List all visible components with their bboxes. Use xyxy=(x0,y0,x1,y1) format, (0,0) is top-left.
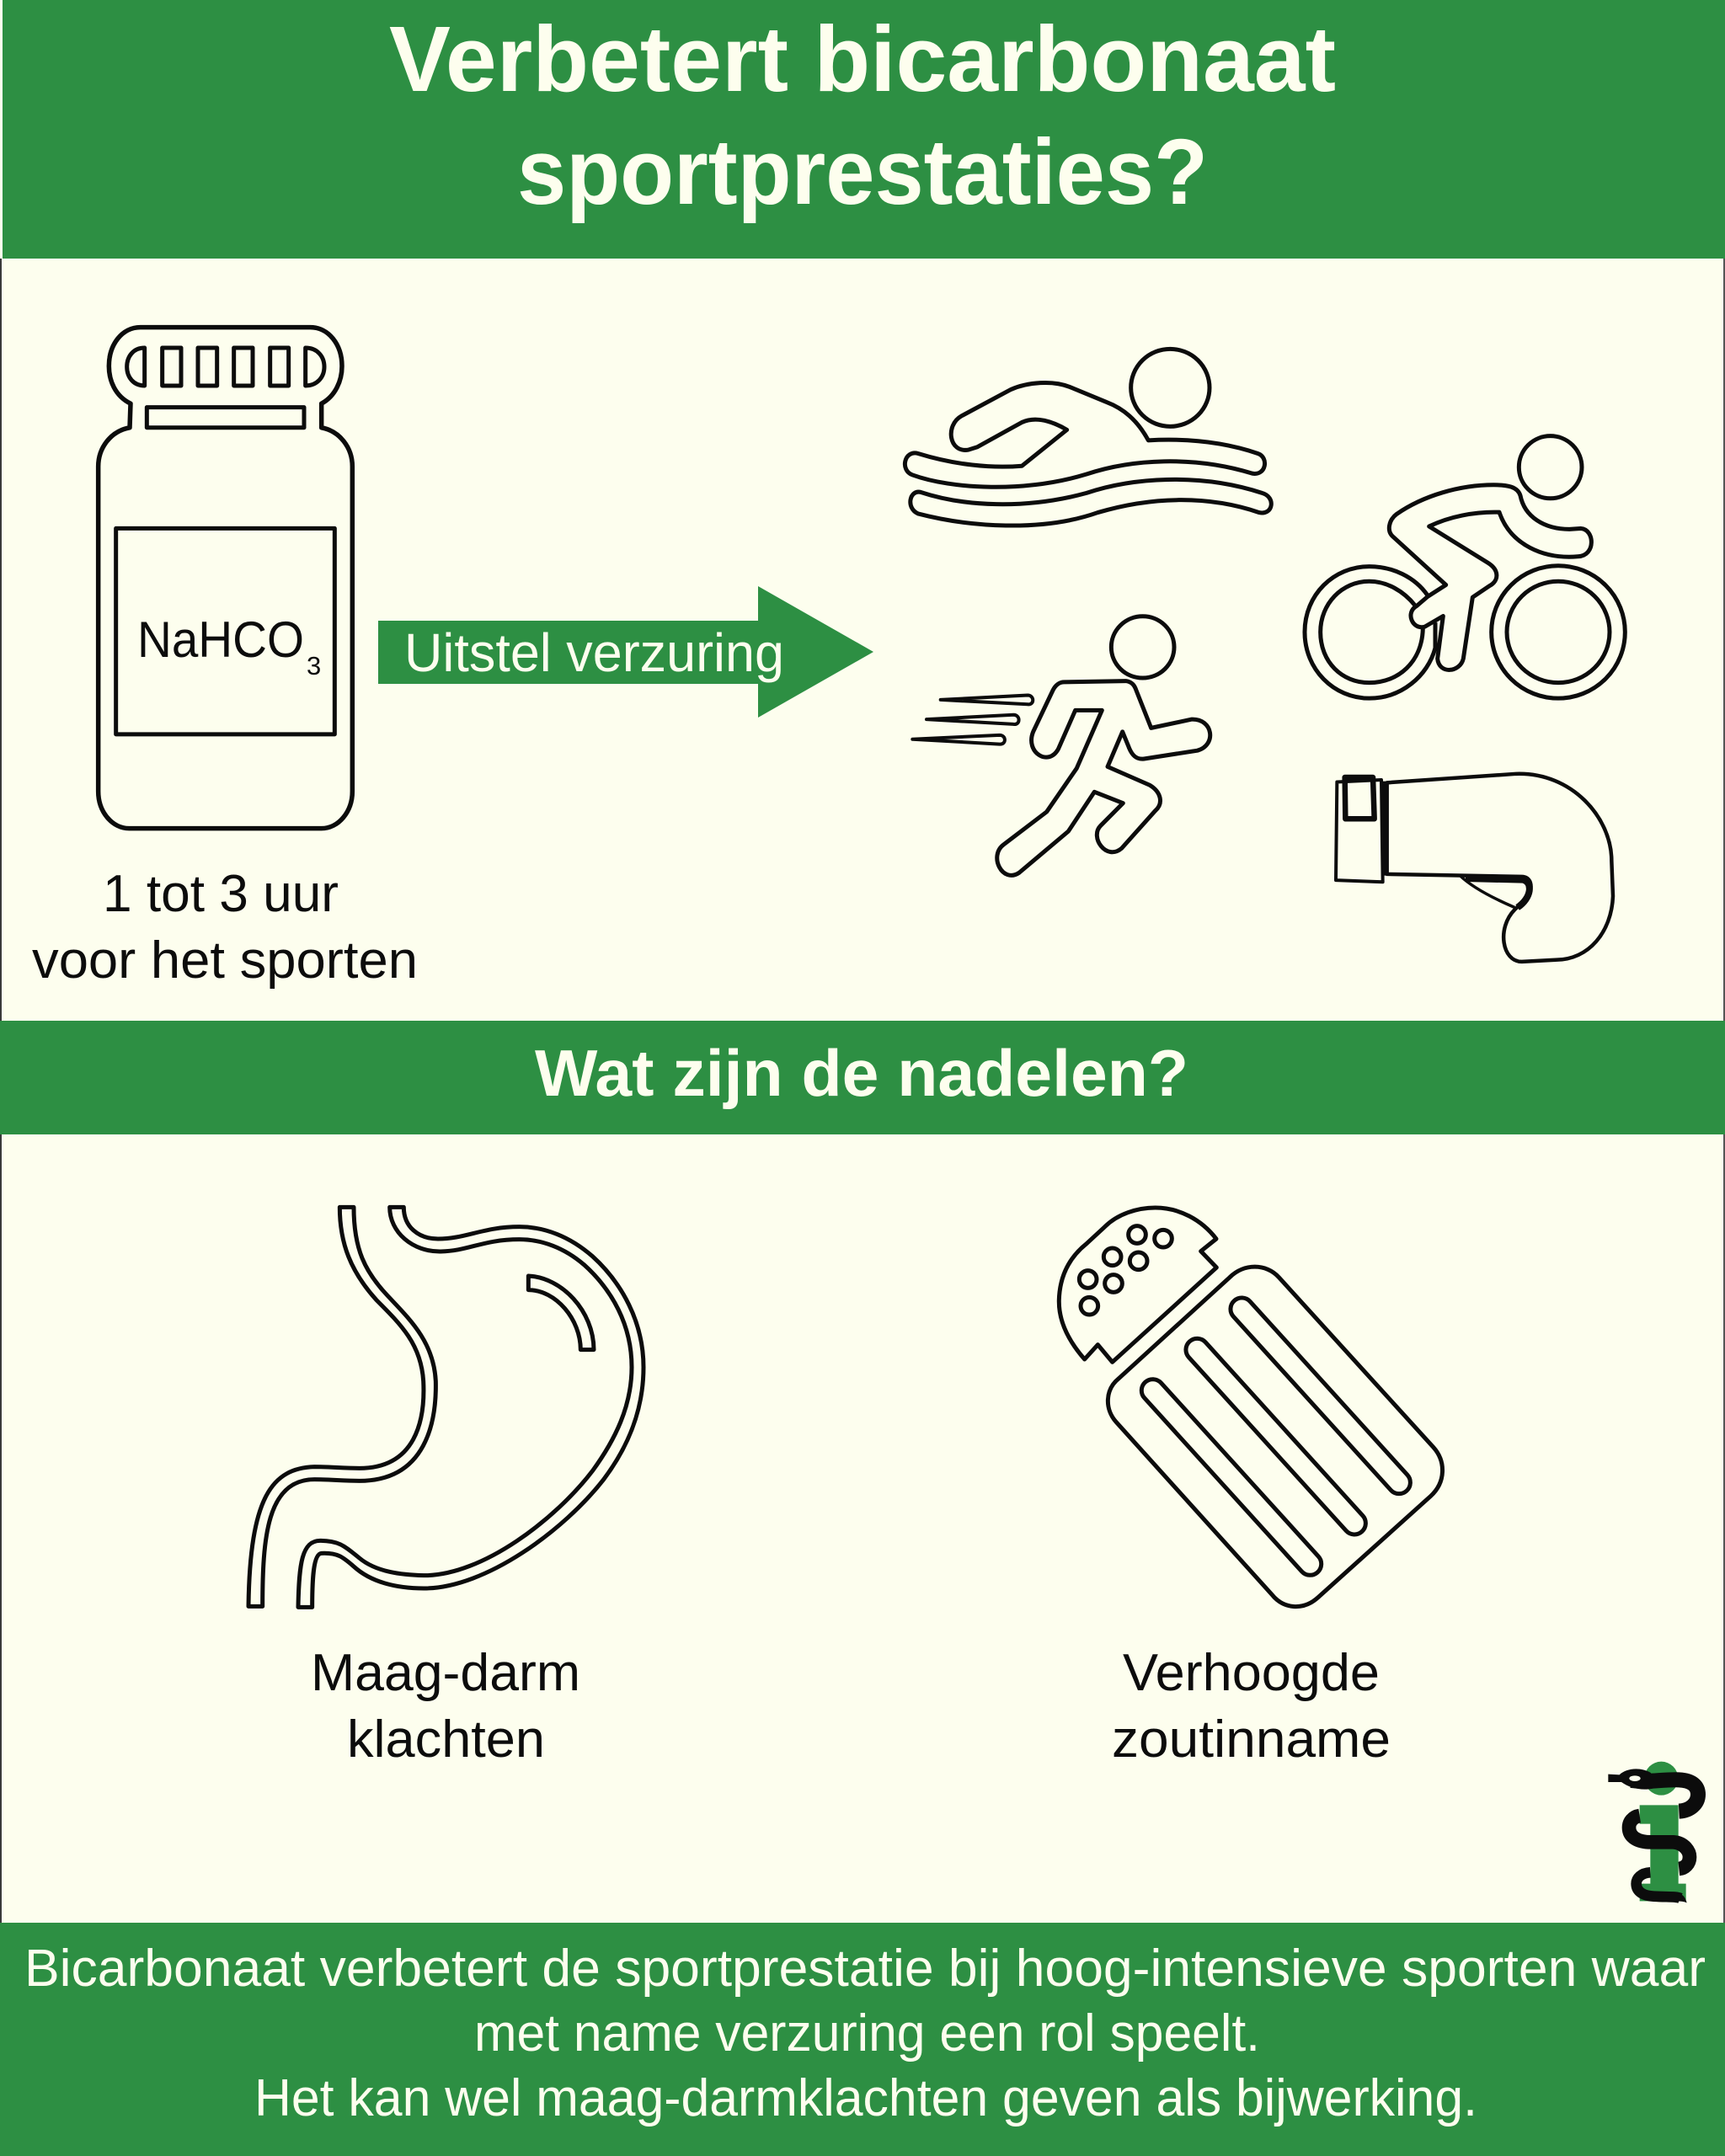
title: Verbetert bicarbonaat xyxy=(389,8,1336,111)
icon: boxing glove xyxy=(1336,774,1613,962)
jar label: NaHCO3: NaHCO xyxy=(137,611,304,668)
icon: cyclist xyxy=(1305,436,1625,698)
arrow: delayed acidification: Uitstel verzuring xyxy=(404,622,784,683)
icon: swimmer xyxy=(905,349,1271,526)
summary text: Bicarbonaat verbetert de sportprestatie bij hoog-intensieve sporten waar xyxy=(24,1940,1706,1998)
title: sportprestaties? xyxy=(517,120,1208,224)
caption: timing: voor het sporten xyxy=(32,931,418,990)
caption: increased salt intake: Verhoogde xyxy=(1123,1644,1380,1702)
band: disadvantages xyxy=(0,1021,1725,1134)
summary text: Het kan wel maag-darmklachten geven als bijwerking. xyxy=(254,2069,1477,2127)
caption: increased salt intake xyxy=(1112,1644,1391,1769)
heading: Wat zijn de nadelen? xyxy=(535,1036,1188,1110)
icon: bicarbonate jar xyxy=(99,328,352,829)
icon: stomach xyxy=(248,1207,644,1607)
title banner xyxy=(3,0,1725,259)
caption: increased salt intake: zoutinname xyxy=(1112,1710,1391,1769)
caption: timing: 1 tot 3 uur xyxy=(103,865,339,923)
summary text xyxy=(24,1940,1706,2127)
icon: salt shaker xyxy=(1059,1208,1443,1607)
title xyxy=(389,8,1336,224)
summary text: met name verzuring een rol speelt. xyxy=(474,2004,1260,2063)
summary panel xyxy=(0,1923,1725,2156)
icon: runner xyxy=(912,616,1210,875)
caption: timing xyxy=(32,865,418,990)
caption: stomach complaints: Maag-darm xyxy=(311,1644,580,1702)
jar label: NaHCO3: 3 xyxy=(307,651,321,680)
caption: stomach complaints: klachten xyxy=(347,1710,545,1769)
icon: logo i with snake xyxy=(1608,1762,1698,1903)
caption: stomach complaints xyxy=(311,1644,580,1769)
arrow: delayed acidification xyxy=(378,586,873,718)
